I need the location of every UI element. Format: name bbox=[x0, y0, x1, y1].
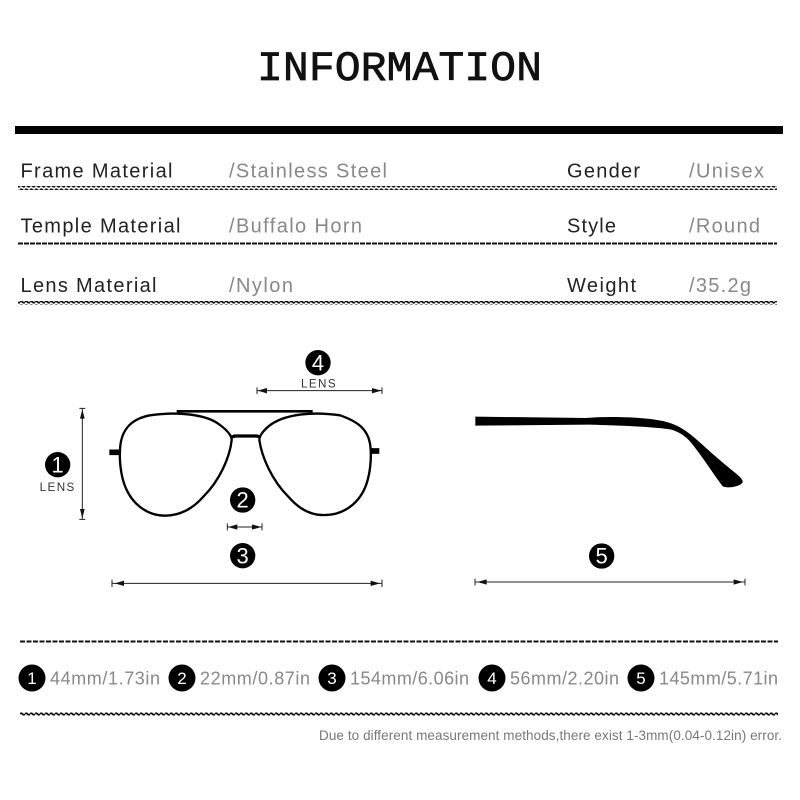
spec: gender: Gender bbox=[567, 160, 640, 182]
measurement 5 bbox=[628, 664, 778, 692]
dimension 1: lens height bbox=[40, 408, 85, 519]
spec: lens material: Lens Material bbox=[20, 275, 156, 297]
dimension 3: total width bbox=[112, 543, 382, 587]
spec: temple material bbox=[20, 216, 362, 238]
dimension 4: lens width: LENS bbox=[301, 377, 336, 390]
dimension 3: total width: 3 bbox=[237, 543, 249, 568]
spec: temple material: /Buffalo Horn bbox=[229, 216, 362, 238]
spec: gender: /Unisex bbox=[689, 160, 764, 182]
spec: gender bbox=[567, 160, 764, 182]
dimension 5: temple length: 5 bbox=[596, 544, 608, 569]
spec: weight: Weight bbox=[567, 275, 636, 297]
spec: lens material bbox=[20, 275, 293, 297]
measurement 2: 22mm/0.87in bbox=[200, 668, 310, 688]
measurement 3: 154mm/6.06in bbox=[350, 668, 469, 688]
measurement 5: 5 bbox=[636, 669, 646, 688]
icon: temple arm bbox=[475, 417, 743, 487]
spec: weight: /35.2g bbox=[689, 275, 751, 297]
spec: frame material: Frame Material bbox=[20, 160, 172, 182]
measurement 5: 145mm/5.71in bbox=[659, 668, 778, 688]
spec: style: Style bbox=[567, 216, 616, 238]
dimension 1: lens height: LENS bbox=[40, 481, 75, 494]
title: INFORMATION bbox=[257, 45, 542, 93]
dimension 2: bridge width bbox=[227, 487, 262, 530]
dimension 4: lens width: 4 bbox=[312, 350, 324, 375]
spec: frame material bbox=[20, 160, 387, 182]
dimension 5: temple length bbox=[475, 543, 745, 585]
measurement 1: 1 bbox=[27, 669, 37, 688]
measurement 2 bbox=[168, 664, 310, 692]
footnote: Due to different measurement methods,there exist 1-3mm(0.04-0.12in) error. bbox=[319, 728, 782, 743]
diagram: side view of temple arm bbox=[475, 417, 745, 585]
measurement 3: 3 bbox=[327, 669, 337, 688]
dimension 1: lens height: 1 bbox=[52, 452, 64, 477]
spec: frame material: /Stainless Steel bbox=[229, 160, 387, 182]
measurement 1: 44mm/1.73in bbox=[50, 668, 160, 688]
spec: weight bbox=[567, 275, 751, 297]
measurement 3 bbox=[318, 664, 469, 692]
diagram: front view of glasses bbox=[40, 350, 382, 587]
spec: style bbox=[567, 216, 760, 238]
dimension 4: lens width bbox=[257, 350, 382, 394]
spec: style: /Round bbox=[689, 216, 760, 238]
measurement 4: 4 bbox=[487, 669, 497, 688]
spec: temple material: Temple Material bbox=[20, 216, 180, 238]
panel: specifications bbox=[20, 160, 764, 297]
heading rule bbox=[15, 126, 783, 134]
measurement 4: 56mm/2.20in bbox=[510, 668, 619, 688]
panel: measurements bbox=[18, 664, 778, 692]
measurement 2: 2 bbox=[177, 669, 187, 688]
measurement 1 bbox=[18, 664, 160, 692]
dimension 2: bridge width: 2 bbox=[237, 488, 249, 513]
spec: lens material: /Nylon bbox=[229, 275, 293, 297]
icon: glasses frame bbox=[109, 411, 379, 516]
measurement 4 bbox=[478, 664, 619, 692]
